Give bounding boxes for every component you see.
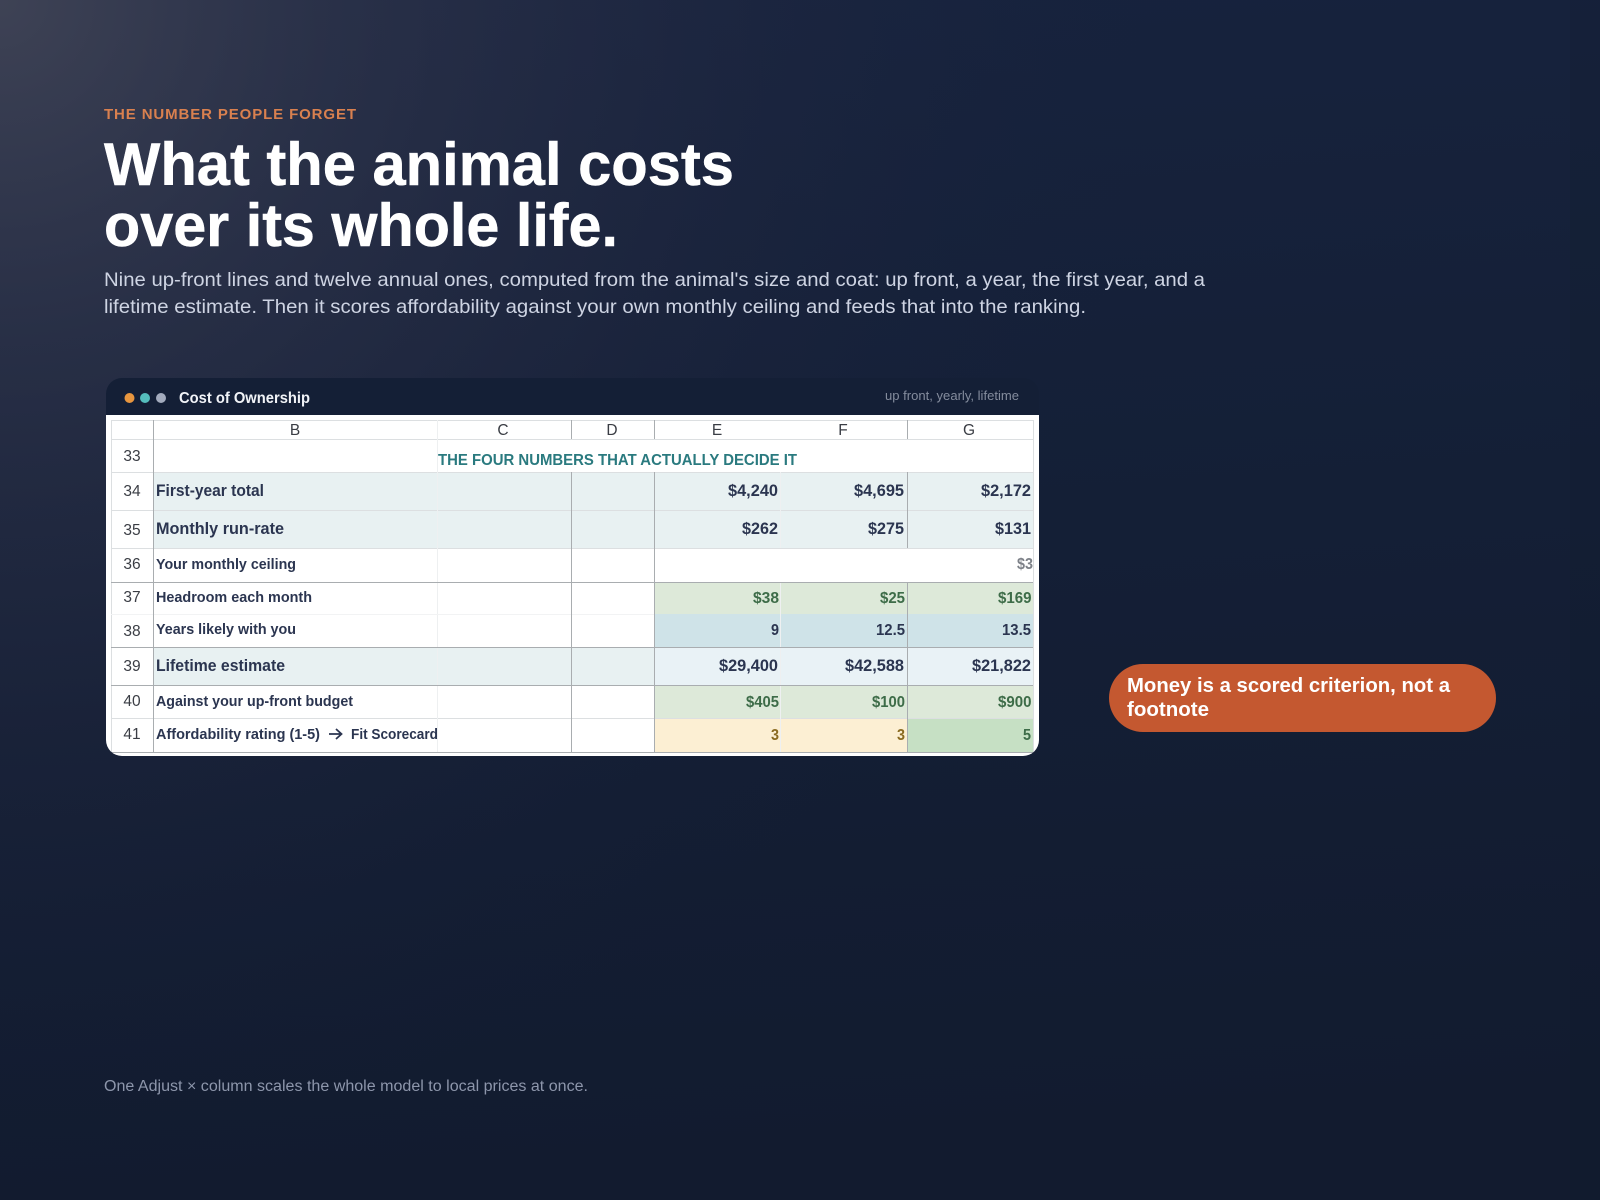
panel: cost of ownership window bbox=[106, 378, 1039, 756]
monthly ceiling value: $3 bbox=[1017, 556, 1033, 573]
affordability rating values: 3 bbox=[771, 727, 779, 744]
headroom values: $25 bbox=[880, 590, 905, 607]
window title bar: up front, yearly, lifetime bbox=[885, 388, 1019, 403]
column headers: E bbox=[712, 422, 722, 439]
row numbers: 36 bbox=[123, 556, 141, 573]
monthly run-rate values bbox=[742, 522, 1031, 536]
subtitle: Nine up-front lines and twelve annual ones, computed from the animal's size and coat: up front, a year, the first year, and a bbox=[104, 269, 1205, 291]
row numbers: 39 bbox=[123, 658, 141, 675]
row labels: Your monthly ceiling bbox=[156, 556, 296, 573]
window title bar bbox=[106, 378, 1039, 416]
column headers bbox=[291, 424, 974, 435]
row numbers: 41 bbox=[123, 726, 141, 743]
callout pill: Money is a scored criterion, not a bbox=[1127, 674, 1451, 697]
window title bar: Cost of Ownership bbox=[179, 390, 310, 407]
column headers: D bbox=[606, 422, 618, 439]
affordability rating values: 3 bbox=[897, 727, 905, 744]
headroom values: $38 bbox=[753, 590, 779, 607]
row numbers: 33 bbox=[123, 448, 141, 465]
footnote: One Adjust × column scales the whole model to local prices at once. bbox=[104, 1078, 588, 1095]
row numbers: 34 bbox=[123, 483, 141, 500]
callout pill: footnote bbox=[1127, 698, 1209, 721]
years likely values bbox=[772, 624, 1031, 635]
monthly run-rate values: $275 bbox=[868, 519, 904, 538]
row numbers: 40 bbox=[123, 693, 141, 710]
row labels: Affordability rating (1-5) bbox=[156, 726, 320, 743]
row labels: Against your up-front budget bbox=[156, 693, 353, 710]
subtitle bbox=[104, 269, 1205, 318]
callout pill bbox=[1109, 664, 1496, 732]
column headers: F bbox=[838, 422, 848, 439]
row numbers: 38 bbox=[123, 623, 141, 640]
row labels: Headroom each month bbox=[156, 589, 312, 606]
lifetime estimate values: $42,588 bbox=[845, 656, 904, 675]
lifetime estimate values: $29,400 bbox=[719, 656, 778, 675]
table heading: THE FOUR NUMBERS THAT ACTUALLY DECIDE IT bbox=[438, 452, 797, 469]
up-front budget values: $900 bbox=[998, 694, 1032, 711]
eyebrow label: THE NUMBER PEOPLE FORGET bbox=[104, 106, 356, 123]
row fills bbox=[153, 472, 1033, 752]
column headers: G bbox=[963, 422, 975, 439]
spreadsheet bbox=[106, 415, 1039, 756]
title: What the animal costs bbox=[104, 131, 734, 198]
affordability rating values bbox=[771, 729, 1031, 740]
up-front budget values bbox=[746, 696, 1031, 708]
headroom values bbox=[753, 592, 1031, 604]
years likely values: 9 bbox=[771, 622, 779, 639]
years likely values: 13.5 bbox=[1002, 622, 1031, 639]
first-year total values: $4,240 bbox=[728, 481, 778, 500]
lifetime estimate values: $21,822 bbox=[972, 656, 1031, 675]
row labels: Years likely with you bbox=[156, 621, 296, 638]
affordability rating values: 5 bbox=[1023, 727, 1031, 744]
up-front budget values: $100 bbox=[872, 694, 905, 711]
row numbers bbox=[123, 448, 141, 743]
lifetime estimate values bbox=[719, 658, 1030, 674]
first-year total values: $4,695 bbox=[854, 481, 904, 500]
headroom values: $169 bbox=[998, 590, 1032, 607]
title bbox=[104, 131, 734, 259]
title: over its whole life. bbox=[104, 192, 618, 259]
monthly run-rate values: $131 bbox=[995, 519, 1031, 538]
column headers: B bbox=[290, 422, 300, 439]
row labels bbox=[156, 482, 438, 743]
years likely values: 12.5 bbox=[876, 622, 905, 639]
row labels: Fit Scorecard bbox=[351, 726, 438, 743]
up-front budget values: $405 bbox=[746, 694, 779, 711]
row labels: First-year total bbox=[156, 482, 264, 500]
row labels: Monthly run-rate bbox=[156, 520, 284, 538]
row numbers: 35 bbox=[123, 522, 141, 539]
subtitle: lifetime estimate. Then it scores affordability against your own monthly ceiling and feeds that into the ranking. bbox=[104, 296, 1086, 318]
column headers: C bbox=[497, 422, 509, 439]
first-year total values bbox=[728, 484, 1030, 498]
row numbers: 37 bbox=[123, 589, 141, 606]
first-year total values: $2,172 bbox=[981, 481, 1031, 500]
monthly run-rate values: $262 bbox=[742, 519, 778, 538]
row labels: Lifetime estimate bbox=[156, 657, 285, 675]
